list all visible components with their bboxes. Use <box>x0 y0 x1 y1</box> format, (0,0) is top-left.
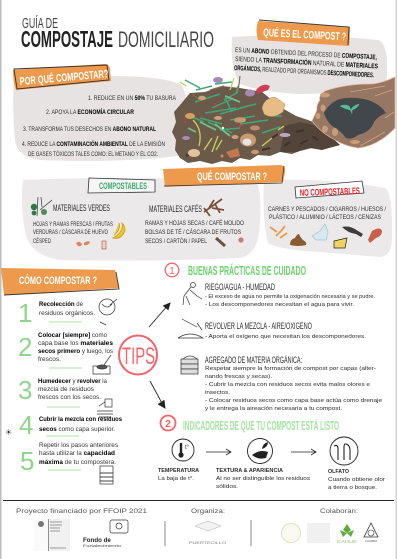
step 2: secos primero y luego, los <box>38 348 113 355</box>
icon: banana <box>113 223 125 238</box>
logo: kahuil: KAHUE <box>337 539 357 544</box>
step 5: hasta utilizar la capacidad <box>39 450 115 457</box>
text block: definition <box>234 47 379 79</box>
text block: materiales verdes: CÉSPED <box>33 238 51 245</box>
logo: circular green <box>282 524 300 542</box>
text block: agregado: Respetar siempre la formación de compost por capas (alter- <box>205 366 376 372</box>
text block: riego: - El exceso de agua no permite la oxigenación necesaria y se pudre. <box>205 294 375 300</box>
panel: compostables <box>22 178 260 261</box>
text block: no compostables list <box>268 207 386 221</box>
text block: benefits: 2. APOYA LA ECONOMÍA CIRCULAR <box>46 107 134 116</box>
icon: egg shell <box>76 241 90 246</box>
step 3 <box>18 375 113 417</box>
title <box>21 15 214 52</box>
text block: benefits: 3. TRANSFORMA TUS DESECHOS EN ABONO NATURAL <box>23 126 156 133</box>
text block: temperatura: La baja de t°. <box>158 476 194 482</box>
icon: tea bag <box>216 238 225 246</box>
step 5: 5 <box>20 446 34 476</box>
number badge 2 <box>160 416 176 430</box>
title: GUÍA DE <box>22 15 58 32</box>
logo: fondo de fortalecimiento <box>83 520 128 548</box>
footer: colaboran <box>282 508 378 544</box>
logo: puertecillo: PUERTECILLO <box>189 541 226 545</box>
text block: temperatura: TEMPERATURA <box>158 468 200 474</box>
text block: materiales cafés: SECOS / CARTÓN / PAPEL <box>145 238 208 245</box>
icon: smell <box>330 437 358 465</box>
illustration: hands holding soil with sprout <box>312 77 395 148</box>
arrow <box>291 449 316 455</box>
text block: olfato: OLFATO <box>328 469 349 475</box>
text block: textura: TEXTURA & APARIENCIA <box>216 468 284 474</box>
text block: textura: Al no ser distinguible los residuos <box>216 476 310 482</box>
number badge 2: 2 <box>165 418 171 430</box>
text block: olfato <box>328 469 385 491</box>
text block: revolver <box>205 321 366 340</box>
step 3: Humedecer y revolver la <box>38 378 107 385</box>
heading: por qué compostar <box>13 64 111 90</box>
text block: benefits: 1. REDUCE EN UN 50% TU BASURA <box>88 95 176 102</box>
text block: riego: - Los descomponedores necesitan el agua para vivir. <box>205 302 354 308</box>
step 4: Cubrir la mezcla con residuos <box>39 416 122 423</box>
tips circle: TIPS <box>122 343 155 370</box>
footer: financing <box>16 508 148 551</box>
text block: agregado: insectos. <box>205 390 230 396</box>
icon: thermometer: t° <box>185 445 190 451</box>
icon: cigarettes <box>270 226 287 238</box>
step 1 <box>18 298 117 328</box>
heading: cómo compostar <box>1 268 119 295</box>
footer: financing: Proyecto financiado por FFOIP 2021 <box>16 508 148 515</box>
step 3: 3 <box>18 375 32 405</box>
step 1: 1 <box>18 298 32 328</box>
text block: benefits: 4. REDUCE LA CONTAMINACIÓN AMBIENTAL DE LA EMISIÓN <box>22 139 165 148</box>
step 1: Recolección de <box>39 301 83 308</box>
text block: agregado: y le entrega la aireación necesaria a tu compost. <box>205 406 342 412</box>
text block: agregado: - Cubrir la mezcla con residuos secos evita malos olores e <box>205 382 371 388</box>
step 3: frescos con los secos. <box>38 394 101 401</box>
icon: bowl <box>99 299 117 325</box>
icon: sun: ☀ <box>5 428 12 437</box>
icon: fish <box>342 226 363 237</box>
icon: hand with soil and sprout <box>248 438 272 464</box>
heading: cómo compostar: CÓMO COMPOSTAR ? <box>19 274 97 287</box>
icon: trowel <box>93 355 111 374</box>
heading: no compostables: NO COMPOSTABLES <box>300 186 360 199</box>
heading: por qué compostar: POR QUÉ COMPOSTAR? <box>19 67 109 88</box>
text block: definition: SIENDO LA TRANSFORMACIÓN NATURAL DE MATERIALES <box>235 54 379 70</box>
step 4: 4 <box>19 410 33 440</box>
title: DOMICILIARIO <box>118 27 214 52</box>
icon: butter <box>334 238 347 248</box>
arrow <box>206 449 231 455</box>
text block: agregado: - Colocar residuos secos como capa base actúa como drenaje <box>205 398 383 404</box>
step 4: secos como capa superior. <box>39 426 115 433</box>
text block: temperatura <box>158 468 200 482</box>
step 4 <box>5 410 122 440</box>
logo: ministry <box>34 519 70 551</box>
logo: triangle: CALIBRA <box>365 539 377 543</box>
section 1: buenas prácticas de cuidado <box>165 263 383 412</box>
footer: colaboran: Colaboran: <box>320 508 358 515</box>
text block: riego: RIEGO/AGUA - HUMEDAD <box>205 282 275 293</box>
step 2: 2 <box>18 332 32 362</box>
text block: agregado: nando frescas y secas). <box>205 374 272 380</box>
heading: compostables <box>88 178 155 193</box>
text block: olfato: Cuando obtiene olor <box>328 477 385 483</box>
logo: fondo de fortalecimiento: Fortalecimiento <box>83 543 122 548</box>
step 2 <box>18 332 114 374</box>
icon: poop <box>290 234 306 246</box>
footer: organiza: Organiza: <box>191 508 225 515</box>
step 5 <box>20 442 118 484</box>
heading: qué compostar: QUÉ COMPOSTAR ? <box>197 170 267 183</box>
text block: materiales cafés: MATERIALES CAFÉS <box>149 204 202 215</box>
arrow: tips to indicadores <box>150 381 165 408</box>
text block: agregado <box>205 355 383 412</box>
logo: fondo de fortalecimiento: Fondo de <box>83 537 111 544</box>
step 1: residuos orgánicos. <box>39 310 95 317</box>
text block: revolver: - Aporta el oxígeno que necesitan los descomponedores. <box>205 334 366 340</box>
heading: qué compostar <box>163 165 285 187</box>
panel: qué es el compost <box>232 20 387 94</box>
icon: green leaves <box>31 197 52 216</box>
heading: compostables: COMPOSTABLES <box>99 181 147 192</box>
text block: materiales cafés: BOLSAS DE TÉ / CÁSCARA DE FRUTOS <box>145 229 241 236</box>
text block: definition: ES UN ABONO OBTENIDO DEL PROCESO DE COMPOSTAJE, <box>235 47 377 61</box>
text block: olfato: a tierra o bosque. <box>328 485 377 491</box>
logo: gray square <box>307 523 330 543</box>
step 2: Colocar [siempre] como <box>38 332 107 339</box>
icon: meat <box>368 228 382 243</box>
arrow: tips to buenas prácticas <box>149 303 170 327</box>
icon: compost bin <box>100 466 113 484</box>
text block: riego <box>205 282 375 308</box>
icon: apple core <box>102 241 106 249</box>
step 5: máxima de tu compostera. <box>39 459 116 466</box>
heading: qué es el compost <box>256 20 350 46</box>
icon: rake and soil <box>178 319 203 338</box>
text block: agregado: AGREGADO DE MATERIA ORGÁNICA: <box>205 355 302 366</box>
text block: benefits <box>22 95 176 158</box>
text block: revolver: REVOLVER LA MEZCLA - AIRE/OXIGENO <box>205 321 312 332</box>
panel: no compostables <box>264 180 392 257</box>
icon: watering <box>97 399 113 417</box>
illustration: compost pile <box>172 76 340 164</box>
footer: organiza <box>164 508 252 546</box>
panel: por qué compostar <box>13 64 186 161</box>
number badge 1: 1 <box>169 266 175 277</box>
step 5: Repetir los pasos anteriores <box>39 442 118 449</box>
number badge 1 <box>165 263 179 277</box>
heading: qué es el compost: QUÉ ES EL COMPOST ? <box>263 26 347 43</box>
text block: no compostables list: PLÁSTICO / ALUMINIO / LÁCTEOS / CENIZAS <box>269 214 381 221</box>
text block: textura <box>216 468 310 490</box>
text block: materiales verdes: VERDURAS / CÁSCARA DE HUEVO <box>33 229 108 236</box>
tips circle <box>119 336 157 374</box>
icon: plastic <box>312 224 328 240</box>
icon: fruit scrap <box>238 237 244 243</box>
step 3: mezcla de residuos <box>38 386 94 393</box>
text block: materiales verdes: HOJAS Y RAMAS FRESCAS / FRUTAS <box>33 222 113 228</box>
text block: materiales cafés <box>145 204 244 245</box>
text block: materiales verdes: MATERIALES VERDES <box>53 203 110 214</box>
icon: thermometer <box>172 439 194 461</box>
text block: materiales verdes <box>33 203 113 245</box>
text block: textura: sólidos. <box>216 484 238 490</box>
step 2: capa base los materiales <box>38 340 114 347</box>
icon: person watering <box>183 282 202 305</box>
step 2: frescos. <box>38 356 61 363</box>
section 2: indicadores <box>158 416 385 491</box>
icon: layered bin <box>181 356 198 374</box>
title: COMPOSTAJE <box>21 26 113 52</box>
text block: benefits: DE GASES TÓXICOS TALES COMO: EL METANO Y EL CO2. <box>28 149 158 158</box>
icon: dry branches <box>204 199 224 216</box>
text block: materiales cafés: RAMAS Y HOJAS SECAS / CAFÉ MOLIDO <box>145 220 244 227</box>
